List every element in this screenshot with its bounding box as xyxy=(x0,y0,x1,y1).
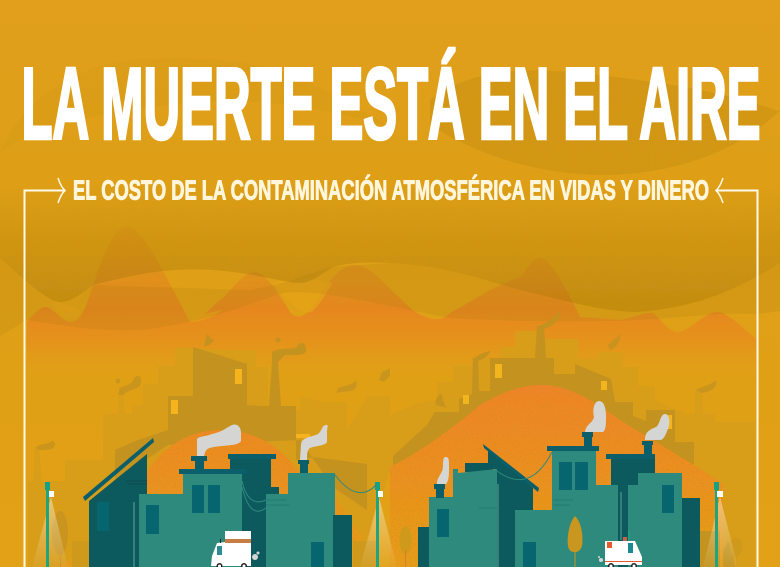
trees and blocks: left xyxy=(52,511,412,567)
hill: left orange dome xyxy=(60,430,367,567)
background: orange mountains xyxy=(27,226,757,372)
dark elements xyxy=(418,527,429,567)
hill: right orange dome xyxy=(390,385,723,567)
city block: left xyxy=(83,425,377,567)
frame with arrows xyxy=(24,178,758,567)
tree: centre right xyxy=(568,516,582,567)
skyline: left smoke xyxy=(36,338,390,450)
skyline: left, near layer xyxy=(115,334,367,510)
background: lower haze band xyxy=(0,258,780,336)
dark house xyxy=(89,454,147,567)
skyline: right windows xyxy=(463,364,672,429)
background: dark haze band xyxy=(0,185,780,312)
smoke plumes xyxy=(437,401,669,484)
cables xyxy=(126,475,377,567)
teal buildings xyxy=(139,474,242,567)
city block: right xyxy=(418,401,700,567)
roof and chimneys xyxy=(547,446,599,451)
background: upper haze waves xyxy=(0,58,780,175)
street lamp: centre left xyxy=(360,482,397,567)
truck xyxy=(211,531,260,567)
skyline: right, far layer xyxy=(390,326,755,567)
roof and chimneys xyxy=(179,469,247,474)
teal buildings xyxy=(429,469,497,567)
skyline: right, near layer xyxy=(393,311,716,500)
dark tower xyxy=(230,459,279,567)
cables xyxy=(479,452,621,567)
windows xyxy=(437,462,674,567)
skyline: left windows xyxy=(171,369,310,438)
smoke plumes xyxy=(197,425,328,460)
tree and block: right street end xyxy=(700,531,742,567)
ambulance xyxy=(598,531,642,567)
street lamp: right xyxy=(703,482,738,567)
skyline: left, far layer xyxy=(28,347,390,567)
background: yellow scoops in haze xyxy=(52,279,333,322)
street lamp: far left xyxy=(32,482,68,567)
windows xyxy=(146,485,324,567)
